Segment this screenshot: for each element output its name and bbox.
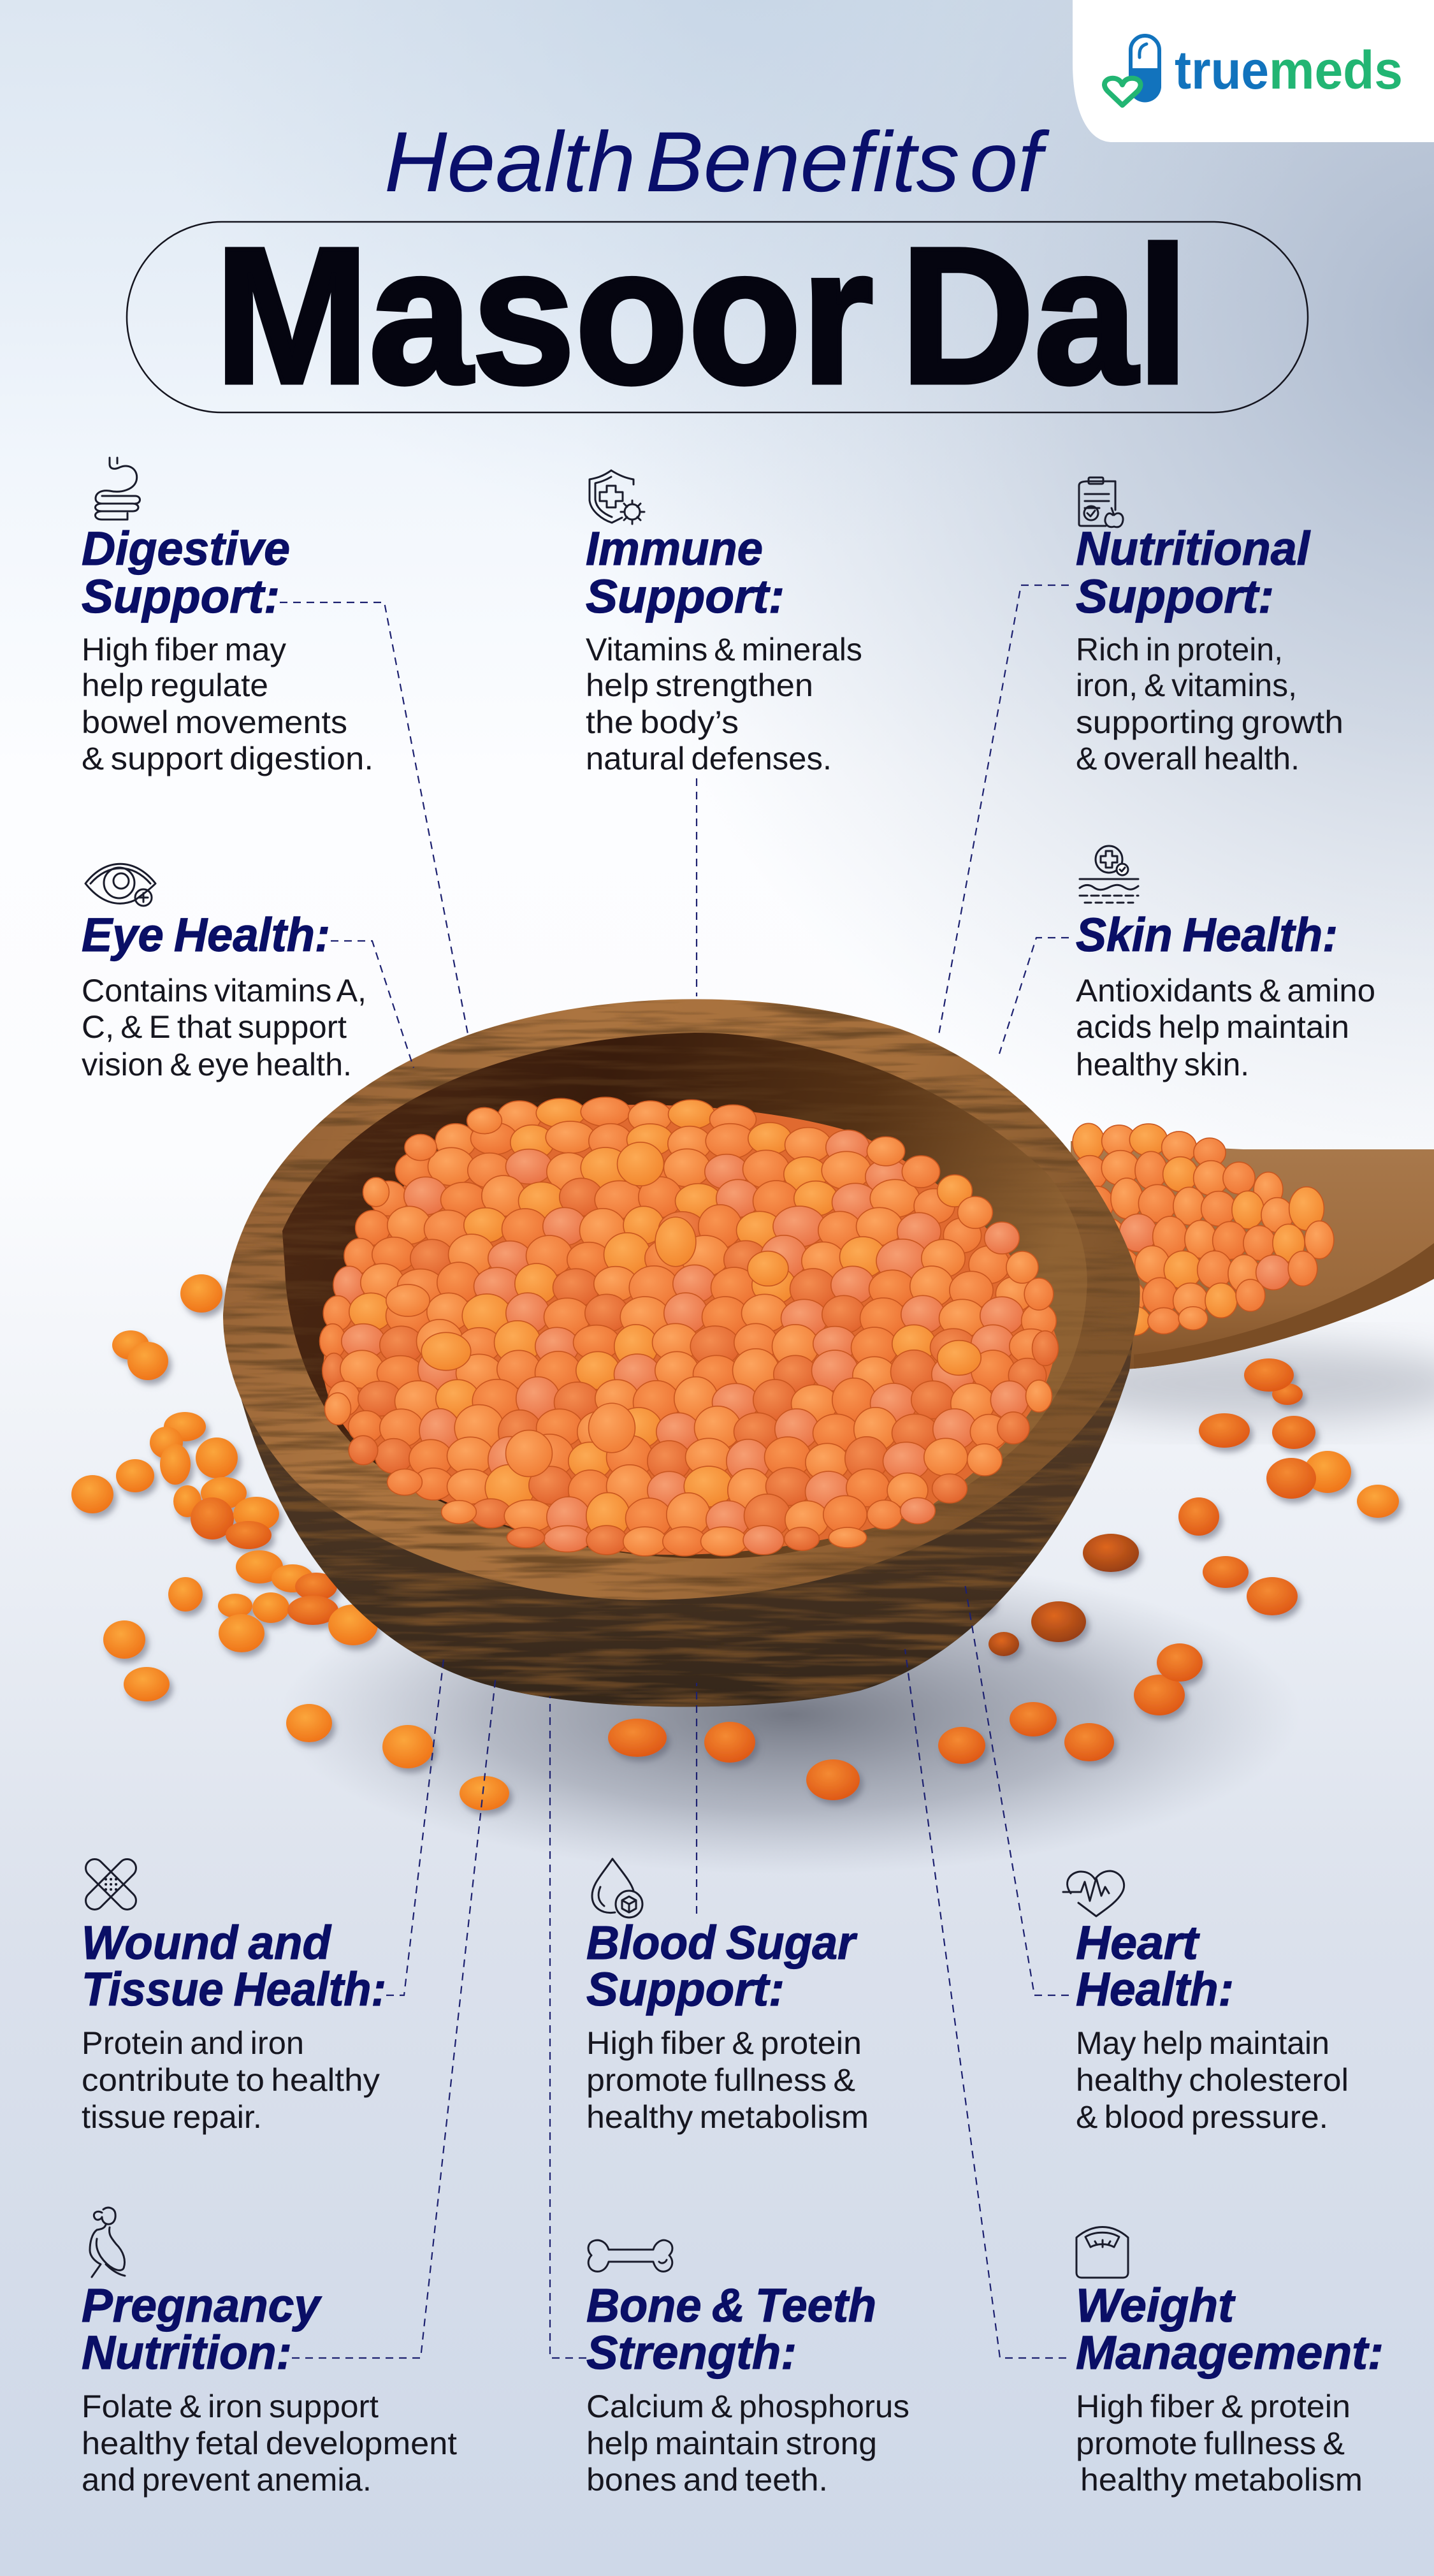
panel: digestive support (82, 458, 373, 776)
description: & overall health. (1076, 741, 1300, 776)
logo tab (1073, 0, 1434, 142)
description: healthy skin. (1076, 1047, 1249, 1082)
heading: Tissue Health: (82, 1963, 386, 2016)
description: tissue repair. (82, 2099, 262, 2135)
panel: weight management (1076, 2227, 1384, 2498)
description: promote fullness & (1076, 2426, 1345, 2461)
icon: weighing scale (1076, 2227, 1128, 2278)
description (1076, 973, 1375, 1082)
description: & support digestion. (82, 741, 373, 776)
icon: skin layers (1080, 846, 1138, 903)
description: acids help maintain (1076, 1009, 1349, 1045)
connector lines (280, 585, 1069, 2358)
connector: skin (999, 938, 1069, 1054)
description: iron, & vitamins, (1076, 667, 1297, 703)
heading: Management: (1076, 2326, 1384, 2379)
description: natural defenses. (586, 741, 832, 776)
spoon shadow on table (1052, 1345, 1434, 1422)
heading: Strength: (586, 2326, 797, 2379)
heading: Support: (82, 570, 280, 623)
description: C, & E that support (82, 1009, 347, 1045)
spoon with lentils (1071, 1123, 1434, 1370)
icon: blood drop and sugar cube (592, 1859, 642, 1917)
title line: Health Benefits of (384, 115, 1050, 210)
description (82, 2025, 380, 2135)
connector: digestive (280, 602, 468, 1037)
connector: blood sugar (696, 1683, 697, 1914)
panel: pregnancy nutrition (82, 2208, 457, 2498)
icon: pregnant woman (90, 2208, 125, 2277)
heading: Support: (1076, 570, 1274, 623)
icon: clipboard and apple (1079, 477, 1123, 527)
description: Folate & iron support (82, 2389, 379, 2424)
heading (586, 1916, 858, 2016)
description: help strengthen (586, 667, 813, 703)
heading: Immune (586, 522, 763, 575)
description: healthy metabolism (1080, 2462, 1363, 2498)
description (586, 2389, 909, 2498)
heading: Nutritional (1076, 522, 1310, 575)
description: the body’s (586, 704, 739, 740)
heading (1076, 1916, 1234, 2016)
title main: Masoor Dal (215, 208, 1189, 424)
wooden bowl (223, 999, 1140, 1707)
description (1076, 632, 1343, 776)
heading: Support: (586, 570, 785, 623)
icon: crossed bandage (82, 1856, 140, 1913)
description (82, 2389, 457, 2498)
heading: Nutrition: (82, 2326, 292, 2379)
bowl interior (282, 1033, 1087, 1559)
description: High fiber may (82, 632, 286, 667)
scattered lentils (71, 1274, 1399, 1810)
description: Protein and iron (82, 2025, 304, 2061)
connector: pregnancy (292, 1675, 496, 2358)
heading: Blood Sugar (586, 1916, 858, 1969)
description: Rich in protein, (1076, 632, 1283, 667)
heading (586, 522, 785, 623)
heading: Digestive (82, 522, 290, 575)
connector: heart (964, 1580, 1069, 1995)
description: healthy cholesterol (1076, 2062, 1349, 2098)
description (82, 973, 366, 1082)
heading (82, 1916, 386, 2016)
panel: immune support (586, 470, 862, 776)
title pill (127, 208, 1308, 424)
bowl shadow on table (280, 1555, 1300, 1874)
heading: Weight (1076, 2279, 1236, 2332)
heading (82, 2279, 322, 2379)
description: healthy fetal development (82, 2426, 457, 2461)
description: vision & eye health. (82, 1047, 352, 1082)
heading: Bone & Teeth (586, 2279, 876, 2332)
wordmark: true (1175, 40, 1269, 100)
description: supporting growth (1076, 704, 1343, 740)
connector: wound (386, 1659, 444, 1995)
heading: Eye Health: (82, 908, 330, 961)
description: contribute to healthy (82, 2062, 380, 2098)
heading: Pregnancy (82, 2279, 322, 2332)
description: May help maintain (1076, 2025, 1329, 2061)
panel: heart health (1063, 1871, 1349, 2135)
description: promote fullness & (586, 2062, 855, 2098)
bowl body (223, 1281, 1140, 1707)
description: High fiber & protein (586, 2025, 862, 2061)
description: bowel movements (82, 704, 347, 740)
description (1076, 2025, 1349, 2135)
lentil pile (319, 1097, 1059, 1556)
wordmark: meds (1269, 40, 1403, 100)
description: Vitamins & minerals (586, 632, 862, 667)
connector: weight (905, 1649, 1066, 2358)
icon: heart with pulse (1063, 1871, 1124, 1916)
panel: wound and tissue health (82, 1856, 386, 2135)
icon: eye with plus (85, 864, 156, 906)
heading (82, 522, 290, 623)
panel: eye health (82, 864, 366, 1082)
panel: skin health (1076, 846, 1375, 1082)
heading: Wound and (82, 1916, 332, 1969)
heading: Heart (1076, 1916, 1200, 1969)
heading (586, 2279, 876, 2379)
description (82, 632, 373, 776)
icon: stomach and intestines (96, 458, 140, 520)
description: help regulate (82, 667, 268, 703)
description: Antioxidants & amino (1076, 973, 1375, 1008)
description (586, 2025, 869, 2135)
description: and prevent anemia. (82, 2462, 372, 2498)
icon: capsule and heart (1104, 36, 1161, 105)
description: help maintain strong (586, 2426, 877, 2461)
heading: Support: (586, 1963, 785, 2016)
icon: shield and virus (590, 470, 644, 524)
description: & blood pressure. (1076, 2099, 1328, 2135)
heading (1076, 2279, 1384, 2379)
panel: blood sugar support (586, 1859, 869, 2135)
description (1076, 2389, 1363, 2498)
connector: immune (696, 778, 697, 996)
description: healthy metabolism (586, 2099, 869, 2135)
panel: nutritional support (1076, 477, 1343, 776)
description: bones and teeth. (586, 2462, 828, 2498)
description: Calcium & phosphorus (586, 2389, 909, 2424)
bowl rim (223, 999, 1140, 1600)
connector: nutritional (939, 585, 1069, 1035)
heading: Skin Health: (1076, 908, 1338, 961)
description: High fiber & protein (1076, 2389, 1351, 2424)
icon: bone (588, 2240, 672, 2271)
connector: bone (550, 1696, 586, 2358)
heading: Health: (1076, 1963, 1234, 2016)
panel: bone and teeth strength (586, 2240, 909, 2498)
heading (1076, 522, 1310, 623)
description (586, 632, 862, 776)
connector: eye (331, 941, 414, 1068)
description: Contains vitamins A, (82, 973, 366, 1008)
